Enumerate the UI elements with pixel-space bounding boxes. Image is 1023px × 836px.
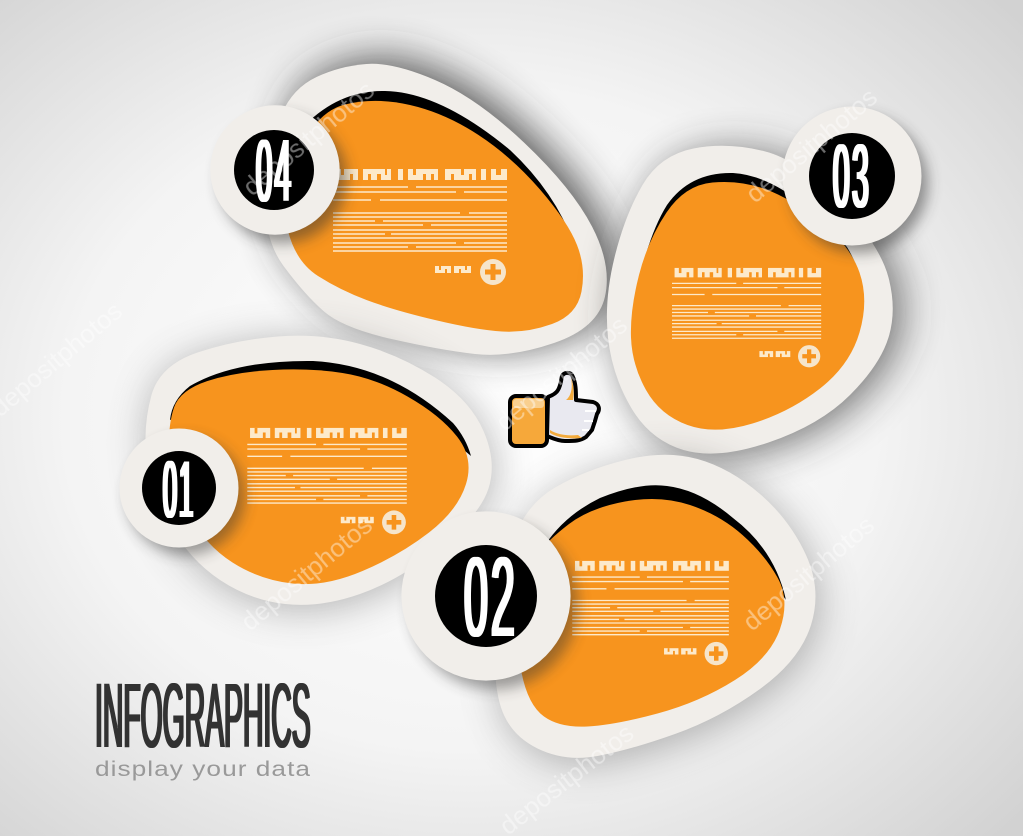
panel 03 shadow	[617, 150, 903, 458]
panel 04 black edge	[305, 91, 574, 244]
panel 03 number badge: 03	[833, 126, 871, 227]
panel 03 card	[607, 146, 893, 454]
panel 02 black edge	[545, 485, 786, 600]
panel 02 number badge	[401, 511, 578, 689]
panel 04 orange blob	[285, 101, 583, 332]
panel 02 text block	[572, 561, 729, 665]
panel 04 text block	[333, 169, 507, 285]
panel 04 number badge	[210, 105, 347, 243]
panel 01 number badge: 01	[163, 444, 195, 535]
panel 01 shadow	[147, 340, 494, 609]
panel 02 orange blob	[518, 499, 784, 727]
panel 02 shadow	[499, 461, 819, 764]
watermarks: depositphotos	[490, 310, 633, 437]
panel 03 orange blob	[631, 182, 864, 430]
watermarks	[0, 75, 883, 836]
panel 03 text block	[672, 268, 821, 367]
panel 01	[120, 336, 494, 609]
panel 04 card	[265, 64, 607, 355]
panel 04 number badge: 04	[256, 122, 294, 220]
icon: thumbs up	[510, 373, 599, 446]
panel 02	[401, 455, 819, 764]
watermarks: depositphotos	[737, 510, 880, 637]
panel 01 orange blob	[169, 369, 469, 584]
panel 03 black edge	[632, 173, 864, 315]
subtitle: display your data	[95, 757, 311, 781]
panel 04	[210, 58, 617, 355]
panel 01 black edge	[170, 361, 471, 456]
panel 01 text block	[247, 428, 407, 534]
panel 02 number badge: 02	[464, 536, 518, 661]
title: INFOGRAPHICS	[95, 665, 311, 767]
panel 03 number badge	[782, 106, 928, 253]
watermarks: depositphotos	[740, 82, 883, 209]
panel 02 card	[495, 455, 815, 758]
panel 01 card	[145, 336, 492, 605]
panel 01 number badge	[120, 428, 245, 555]
panel 03	[607, 106, 928, 458]
watermarks: depositphotos	[237, 75, 380, 202]
watermarks: depositphotos	[235, 510, 378, 637]
panel 04 shadow	[275, 58, 617, 349]
